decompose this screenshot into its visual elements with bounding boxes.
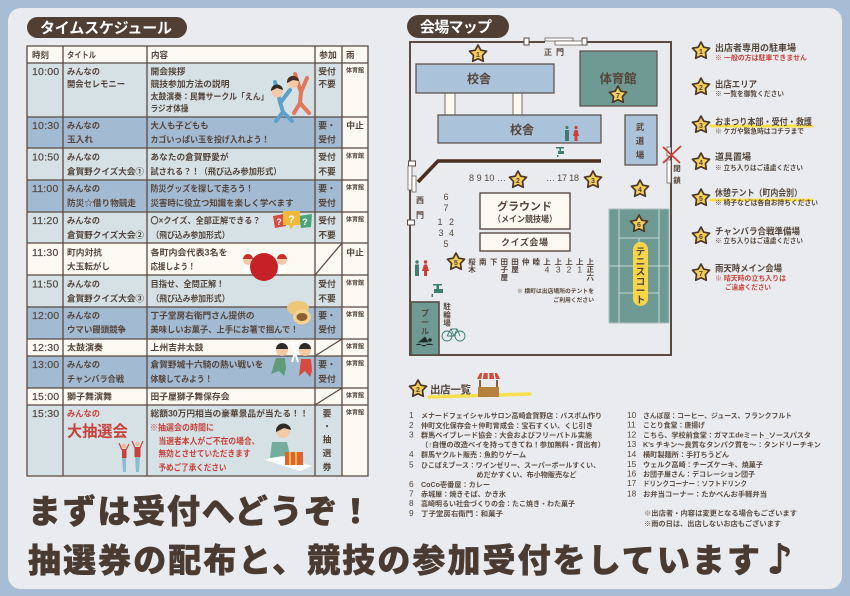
quiz venue label: クイズ会場 (501, 236, 548, 248)
closed gate: 閉 (673, 164, 681, 173)
neighbourhood tent labels: 仲 (522, 256, 530, 266)
shop position numbers: 2 (449, 217, 454, 227)
shop list: 10 to 18: お団子屋さん：デコレーション団子 (643, 470, 755, 478)
row 11:50: 体育館 (346, 279, 364, 287)
legend 4: 道具置場 (715, 151, 751, 162)
illustration: quiz bubbles: ? (276, 217, 282, 227)
shop list: 10 to 18: 17 (627, 478, 637, 488)
closed gate: 鎖 (673, 175, 681, 185)
row 11:00: 要・ (318, 184, 336, 194)
map star markers (447, 45, 649, 269)
swimming pool: ー (421, 318, 429, 327)
shop list: 10 to 18: 13 (627, 439, 637, 449)
table header row: 参加 (319, 49, 337, 60)
row 12:00: 美味しいお菓子、上手にお箸で掴んで！ (150, 324, 298, 334)
neighbourhood tent labels: 下 (490, 258, 498, 266)
legend 1: 1 (699, 49, 703, 56)
table header row: 時刻 (32, 50, 49, 60)
legend 2 (692, 78, 784, 98)
row 11:30: 大玉転がし (67, 260, 110, 272)
bicycle parking: 輪 (443, 310, 451, 320)
bicycle parking: 場 (443, 318, 451, 328)
row 15:30: grand lottery: 無効とさせていただきます (158, 448, 251, 458)
legend 4 (692, 151, 803, 172)
ground label: （メイン競技場） (493, 214, 557, 224)
row 12:30: 体育館 (346, 342, 364, 350)
row 10:50: みんなの (67, 152, 100, 162)
row 10:30: 大人も子どもも (150, 120, 208, 130)
shop list: 10 to 18: こちら、学校前食堂：ガマエdeミート_ソースパスタ (643, 430, 811, 440)
shop list: 1 to 9: 群馬ヤクルト販売：魚釣りゲーム (421, 450, 526, 459)
neighbourhood tent labels (468, 256, 595, 282)
row 13:00: チャンバラ合戦 (67, 373, 124, 384)
map star markers: 3 (591, 178, 595, 185)
row 11:30: 11:30 (32, 247, 58, 259)
shop list: 1 to 9: メナードフェイシャルサロン高崎倉賀野店：バスボム作り (421, 411, 602, 420)
legend 4: ※ 立ち入りはご遠慮ください (715, 163, 803, 172)
main gate (524, 38, 587, 57)
martial arts hall (625, 115, 657, 165)
shop position numbers: 3 (438, 228, 444, 238)
shop list: 10 to 18: 18 (627, 488, 637, 498)
shop list: 10 to 18: ことり食堂：唐揚げ (643, 420, 705, 430)
shop list: 10 to 18 (627, 410, 821, 498)
west gate: 門 (416, 211, 424, 220)
heading: shop list (409, 380, 530, 397)
shop list: 10 to 18: 横町製麺所：手打ちうどん (643, 450, 729, 459)
row 10:30: 中止 (346, 120, 364, 130)
shop list: 10 to 18: 15 (627, 459, 637, 469)
illustration: quiz bubbles: ? (288, 214, 295, 226)
martial arts hall: 場 (636, 150, 645, 160)
ground label (480, 193, 570, 229)
row 11:30: 応援しよう！ (150, 260, 196, 272)
row 15:00: 体育館 (346, 392, 364, 400)
row 13:00: 要・ (318, 360, 336, 370)
gymnasium: 体育館 (600, 71, 636, 86)
row 15:00 (32, 390, 364, 403)
gymnasium (580, 51, 657, 106)
tennis court (609, 209, 669, 323)
row 11:20: みんなの (67, 216, 100, 226)
neighbourhood tent labels: 正 (587, 265, 595, 274)
row 11:20: （飛び込み参加形式） (152, 229, 230, 240)
neighbourhood tent labels: 上 (543, 256, 551, 266)
neighbourhood tent labels: 1 (577, 264, 582, 274)
row 10:30: 要・ (318, 120, 336, 130)
tennis court: コ (636, 277, 645, 288)
row 10:30: カゴいっぱい玉を投げ入れよう！ (150, 134, 270, 144)
shop list: 1 to 9: 赤城屋：焼きそば、かき氷 (421, 490, 506, 498)
tennis court: ー (636, 286, 645, 297)
legend 3: おまつり本部・受付・救護 (715, 116, 812, 127)
neighbourhood tent labels: 睦 (533, 256, 541, 266)
row 11:20: 受付 (318, 214, 336, 226)
legend 7: ※ 晴天時の立ち入りは (715, 274, 786, 283)
row 15:30: grand lottery: 券 (323, 461, 332, 472)
neighbourhood tent labels: 上 (576, 256, 584, 266)
row 10:00: 開会挨拶 (150, 66, 186, 76)
legend 7: 雨天時メイン会場 (715, 263, 782, 274)
heading: venue map: 会場マップ (420, 19, 492, 36)
swimming pool: ル (421, 327, 429, 336)
panel: venue map (408, 38, 681, 355)
row 11:00: 防災☆借り物競走 (67, 197, 136, 208)
row 10:00: 10:00 (32, 66, 59, 78)
shop list: 1 to 9: 丁子堂房右衛門：和菓子 (421, 509, 503, 518)
row 10:00: みんなの (67, 66, 100, 76)
row 10:00: 不要 (318, 79, 336, 89)
row 10:50 (32, 151, 364, 176)
legend 7: ご遠慮ください (725, 282, 771, 291)
illustration: cheering people (119, 441, 143, 472)
neighbourhood tent labels: 上 (555, 256, 563, 266)
neighbourhood tent labels: 3 (556, 264, 561, 274)
table header row: 内容 (151, 50, 169, 60)
bottom message line 2: 抽選券の配布と、競技の参加受付をしています (28, 542, 760, 579)
illustration: child with prize box (265, 423, 312, 471)
tent usage note: ※ 横町は出店場所のテントを (517, 287, 594, 295)
school building north: 校舎 (467, 71, 491, 86)
swimming pool (411, 302, 439, 355)
row 15:00: 田子屋獅子舞保存会 (150, 390, 230, 402)
row 10:50: 不要 (318, 166, 336, 176)
map star markers: 1 (476, 52, 480, 59)
panel: map legend (692, 42, 818, 291)
shop list: 1 to 9: 6 (409, 479, 414, 489)
row 11:20: 不要 (318, 230, 336, 240)
row 10:00: ラジオ体操 (150, 102, 189, 114)
row 12:00: 12:00 (32, 310, 59, 322)
icon: toilets south (415, 260, 429, 276)
shop position numbers (437, 173, 579, 249)
row 10:30: 受付 (318, 134, 336, 144)
neighbourhood tent labels: 4 (545, 264, 550, 274)
row 12:00 (32, 310, 364, 334)
shop list: 10 to 18: 16 (627, 468, 637, 478)
row 10:50: 受付 (318, 151, 336, 162)
bicycle parking: 駐 (443, 301, 451, 311)
heading: shop list: 2 (416, 387, 420, 394)
tent usage note (517, 287, 594, 304)
row 11:00: 防災グッズを探して走ろう！ (150, 182, 254, 194)
row 15:30: grand lottery: 要 (323, 408, 332, 418)
legend 3: ※ ケガや緊急時はコチラまで (715, 126, 804, 136)
legend 2: 2 (699, 85, 703, 92)
shop position numbers: 5 (443, 239, 449, 249)
row 12:30: 12:30 (32, 342, 59, 354)
shop list: 1 to 9: 高崎明るい社会づくりの会：たこ焼き・わた菓子 (421, 499, 575, 508)
row 11:00: 11:00 (32, 183, 58, 195)
shop list: 1 to 9: 仲町文化保存会＋仲町育成会：宝石すくい、くじ引き (421, 421, 593, 430)
row 11:00: 体育館 (346, 184, 364, 192)
row 12:00: 体育館 (346, 310, 364, 318)
row 11:50: 不要 (318, 294, 336, 304)
legend 1: ※ 一般の方は駐車できません (715, 53, 807, 62)
row 15:30: grand lottery: 抽 (323, 434, 332, 444)
icon: market stall (477, 373, 500, 397)
neighbourhood tent labels: 上 (587, 256, 595, 266)
illustration: quiz bubbles: ? (302, 217, 308, 227)
heading: shop list: 出店一覧 (430, 383, 472, 396)
neighbourhood tent labels: 木 (468, 264, 476, 274)
shop list: 1 to 9: CoCo壱番屋：カレー (421, 480, 490, 489)
school connectors (445, 93, 522, 115)
bicycle parking (442, 301, 465, 341)
row 15:00: 15:00 (32, 391, 59, 403)
illustration: exercising couple (271, 74, 309, 121)
legend 6 (692, 226, 803, 245)
legend 5: ※ 椅子などは各自お持ちください (715, 198, 818, 207)
row 10:00: 太鼓演奏：民舞サークル「えん」 (150, 90, 268, 102)
row 10:30: 玉入れ (67, 134, 93, 144)
shop list: 10 to 18: ドリンクコーナー：ソフトドリンク (643, 479, 747, 488)
row 10:30: 10:30 (32, 120, 59, 132)
shop list: 10 to 18: さんぽ屋：コーヒー、ジュース、フランクフルト (643, 411, 792, 420)
shop list: 10 to 18: お弁当コーナー：たかべんお手軽弁当 (643, 490, 767, 498)
row 13:00: 倉賀野城十六騎の熱い戦いを (150, 358, 264, 370)
illustration: chanbara kids (271, 343, 312, 377)
row 12:30: 上州吉井太鼓 (150, 342, 204, 352)
row 13:00: 受付 (318, 373, 336, 384)
shop list: 1 to 9: 2 (409, 420, 414, 430)
row 13:00: 体育館 (346, 360, 364, 368)
shop list: 1 to 9: 4 (409, 449, 414, 459)
row 11:30 (32, 246, 364, 272)
table header row (32, 49, 355, 60)
row 13:00: 体験してみよう！ (150, 373, 212, 384)
heading: time schedule: タイムスケジュール (40, 20, 172, 37)
ground label: グラウンド (497, 199, 552, 213)
legend 6: 6 (699, 234, 703, 241)
closed gate (663, 146, 681, 185)
shop list notes: ※出店者・内容は変更となる場合もございます (644, 508, 797, 518)
row 13:00 (32, 358, 364, 384)
legend 6: ※ 立ち入りはご遠慮ください (715, 236, 803, 245)
row 13:00: みんなの (67, 360, 100, 370)
row 13:00: 13:00 (32, 359, 59, 371)
shop list: 10 to 18: 14 (627, 449, 637, 459)
shop list: 1 to 9: めだかすくい、布小物販売など (476, 470, 576, 479)
tennis court: ニ (636, 257, 645, 268)
shop list: 10 to 18: K's チキン～良質なタンパク質を～：タンドリーチキン (643, 440, 821, 449)
main gate: 正 (544, 48, 552, 57)
tennis court: テ (636, 247, 645, 258)
shop list: 1 to 9: 3 (409, 430, 414, 440)
venue boundary wall (410, 42, 671, 355)
legend 2: 出店エリア (715, 78, 757, 89)
row 12:00: 受付 (318, 324, 336, 334)
martial arts hall: 道 (636, 136, 645, 146)
map star markers: 2 (516, 178, 520, 185)
icon: toilets north (565, 126, 579, 141)
neighbourhood tent labels: 上 (565, 256, 573, 266)
neighbourhood tent labels: 桜 (468, 256, 476, 266)
shop position numbers: 1 (437, 217, 443, 227)
legend 5: 休憩テント（町内会別） (715, 187, 802, 198)
row 15:30: grand lottery (32, 408, 364, 472)
neighbourhood tent labels: 子 (501, 265, 509, 274)
icon: faucet north (556, 147, 564, 157)
west gate: 西 (416, 196, 424, 205)
row 11:50 (32, 278, 364, 304)
row 15:30: grand lottery: 選 (323, 447, 332, 458)
shop position numbers: 4 (449, 228, 454, 238)
neighbourhood tent labels: 田 (501, 258, 508, 266)
shop list: 10 to 18: 12 (627, 430, 637, 440)
row 10:30 (32, 120, 364, 144)
illustration: manju buns (287, 301, 311, 324)
legend 4: 4 (699, 160, 703, 167)
row 10:00: 受付 (318, 66, 336, 76)
shop list: 1 to 9: 群馬ベイブレード協会：大会およびフリーバトル実施 (421, 430, 592, 440)
martial arts hall: 武 (636, 122, 645, 132)
row 11:50: 受付 (318, 278, 336, 289)
row 11:50: 11:50 (32, 278, 58, 290)
tent usage note: ご利用ください (553, 296, 594, 304)
map star markers: 4 (638, 187, 642, 194)
shop list: 10 to 18: ウェルク高崎：チーズケーキ、焼菓子 (643, 460, 763, 469)
shop list: 1 to 9: （↑自慢の改造ベイを持ってきてね！参加無料・貸出有） (421, 440, 605, 449)
legend 3 (692, 116, 812, 136)
neighbourhood tent labels: 田 (511, 258, 519, 266)
shop list: 1 to 9: 9 (409, 508, 414, 518)
bottom message line 1: まずは受付へどうぞ！ (28, 493, 372, 530)
row 11:20: 体育館 (346, 216, 364, 224)
row 11:00: 受付 (318, 197, 336, 208)
shop list: 1 to 9 (409, 410, 605, 518)
row 10:00 (32, 66, 364, 114)
row 11:50: 目指せ、全問正解！ (150, 278, 224, 289)
legend 3: 3 (699, 123, 703, 130)
row 11:00 (32, 182, 364, 208)
legend 5 (692, 187, 818, 207)
shop position numbers: 6 (443, 192, 449, 202)
row 10:00: 体育館 (346, 66, 364, 74)
row 10:00: 競技参加方法の説明 (150, 78, 230, 89)
row 15:30: grand lottery: ※抽選会の時間に (150, 422, 214, 432)
row 11:30: 中止 (346, 246, 364, 258)
row 10:50: 体育館 (346, 152, 364, 160)
row 10:50: あなたの倉賀野愛が (150, 151, 229, 162)
shop list: 1 to 9: 8 (409, 498, 414, 508)
shop position numbers: … 17 18 (546, 173, 579, 183)
row 12:30 (32, 342, 364, 354)
row 11:30: 町内対抗 (67, 246, 102, 258)
tennis court: ト (636, 295, 645, 306)
row 15:30: grand lottery: みんなの (67, 408, 100, 418)
table header row: タイトル (67, 50, 96, 60)
row 11:20: 11:20 (32, 215, 58, 227)
row 15:30: grand lottery: 総額30万円相当の豪華景品が当たる！！ (150, 408, 308, 418)
row 12:00: みんなの (67, 310, 100, 320)
tennis court: ス (636, 267, 645, 278)
row 11:00: みんなの (67, 184, 100, 194)
neighbourhood tent labels: 屋 (511, 265, 519, 274)
row 11:20: 〇×クイズ、全部正解できる？ (150, 214, 260, 226)
shop list: 10 to 18: 11 (627, 420, 636, 430)
swimming pool: プ (421, 309, 429, 318)
legend 2: ※ 一覧を御覧ください (715, 89, 784, 98)
row 15:30: grand lottery: 当選者本人がご不在の場合、 (158, 435, 260, 446)
row 10:30: みんなの (67, 120, 100, 130)
icon: faucet south (432, 284, 443, 297)
legend 7 (692, 263, 786, 291)
school building south (438, 115, 601, 143)
quiz venue label (480, 233, 570, 251)
row 11:50: みんなの (67, 279, 100, 289)
row 11:50: 倉賀野クイズ大会③ (67, 292, 144, 304)
shop list: 10 to 18: 10 (627, 410, 637, 420)
row 15:30: grand lottery: 15:30 (32, 408, 59, 420)
row 11:00: 災害時に役立つ知識を楽しく学べます (150, 197, 294, 208)
bottom message line 2: ♪ (767, 537, 793, 583)
west gate (408, 161, 424, 225)
school building north (416, 64, 554, 93)
table header row: 雨 (346, 50, 355, 60)
row 15:30: grand lottery: 体育館 (346, 408, 364, 416)
row 11:30: 各町内会代表3名を (150, 246, 228, 258)
illustration: big red ball (243, 253, 287, 281)
legend 1 (692, 42, 807, 62)
heading: venue map (407, 15, 509, 38)
shop list notes (644, 508, 797, 528)
row 12:00: 丁子堂房右衛門さん提供の (150, 310, 255, 320)
neighbourhood tent labels: 屋 (501, 273, 509, 282)
illustration: quiz bubbles (273, 211, 312, 229)
shop list notes: ※雨の日は、出店しないお店もございます (644, 519, 781, 528)
row 10:50: 倉賀野クイズ大会① (67, 166, 144, 176)
legend 5: 5 (699, 196, 703, 203)
shop position numbers: 7 (443, 203, 449, 213)
neighbourhood tent labels: 南 (479, 256, 487, 266)
shop position numbers: 8 9 10 … (469, 173, 506, 183)
map star markers: 5 (454, 260, 458, 267)
shop list: 1 to 9: 5 (409, 460, 414, 470)
heading: time schedule (27, 17, 187, 38)
row 15:30: grand lottery: ・ (323, 422, 331, 432)
row 10:50: 試される？！（飛び込み参加形式） (150, 166, 282, 176)
shop list: 1 to 9: 1 (409, 410, 414, 420)
row 10:50: 10:50 (32, 152, 59, 164)
row 15:00: 獅子舞演舞 (67, 390, 112, 402)
neighbourhood tent labels: 2 (567, 264, 572, 274)
neighbourhood tent labels: 六 (587, 272, 595, 282)
map star markers: 7 (616, 93, 620, 100)
row 15:30: grand lottery: 予めご了承ください (158, 462, 227, 472)
row 12:00: ウマい饅頭競争 (67, 324, 126, 334)
panel: schedule table (27, 46, 368, 476)
legend 1: 出店者専用の駐車場 (715, 42, 796, 53)
school building south: 校舎 (510, 122, 534, 137)
row 12:00: 要・ (318, 310, 336, 320)
row 11:20 (32, 214, 364, 240)
row 12:30: 太鼓演奏 (67, 342, 103, 352)
legend 7: 7 (699, 271, 703, 278)
row 11:20: 倉賀野クイズ大会② (67, 229, 144, 240)
row 11:50: （飛び込み参加形式） (152, 292, 230, 304)
row 15:30: grand lottery: 大抽選会 (67, 422, 128, 440)
map star markers: 6 (637, 222, 641, 229)
tent row wall (418, 161, 601, 182)
shop list: 1 to 9: 7 (409, 488, 414, 498)
main gate: 門 (556, 48, 564, 57)
row 10:00: 開会セレモニー (67, 78, 125, 89)
legend 6: チャンバラ合戦準備場 (715, 226, 800, 237)
shop list: 1 to 9: ひこばえブース：ワインゼリー、スーパーボールすくい、 (421, 460, 600, 470)
